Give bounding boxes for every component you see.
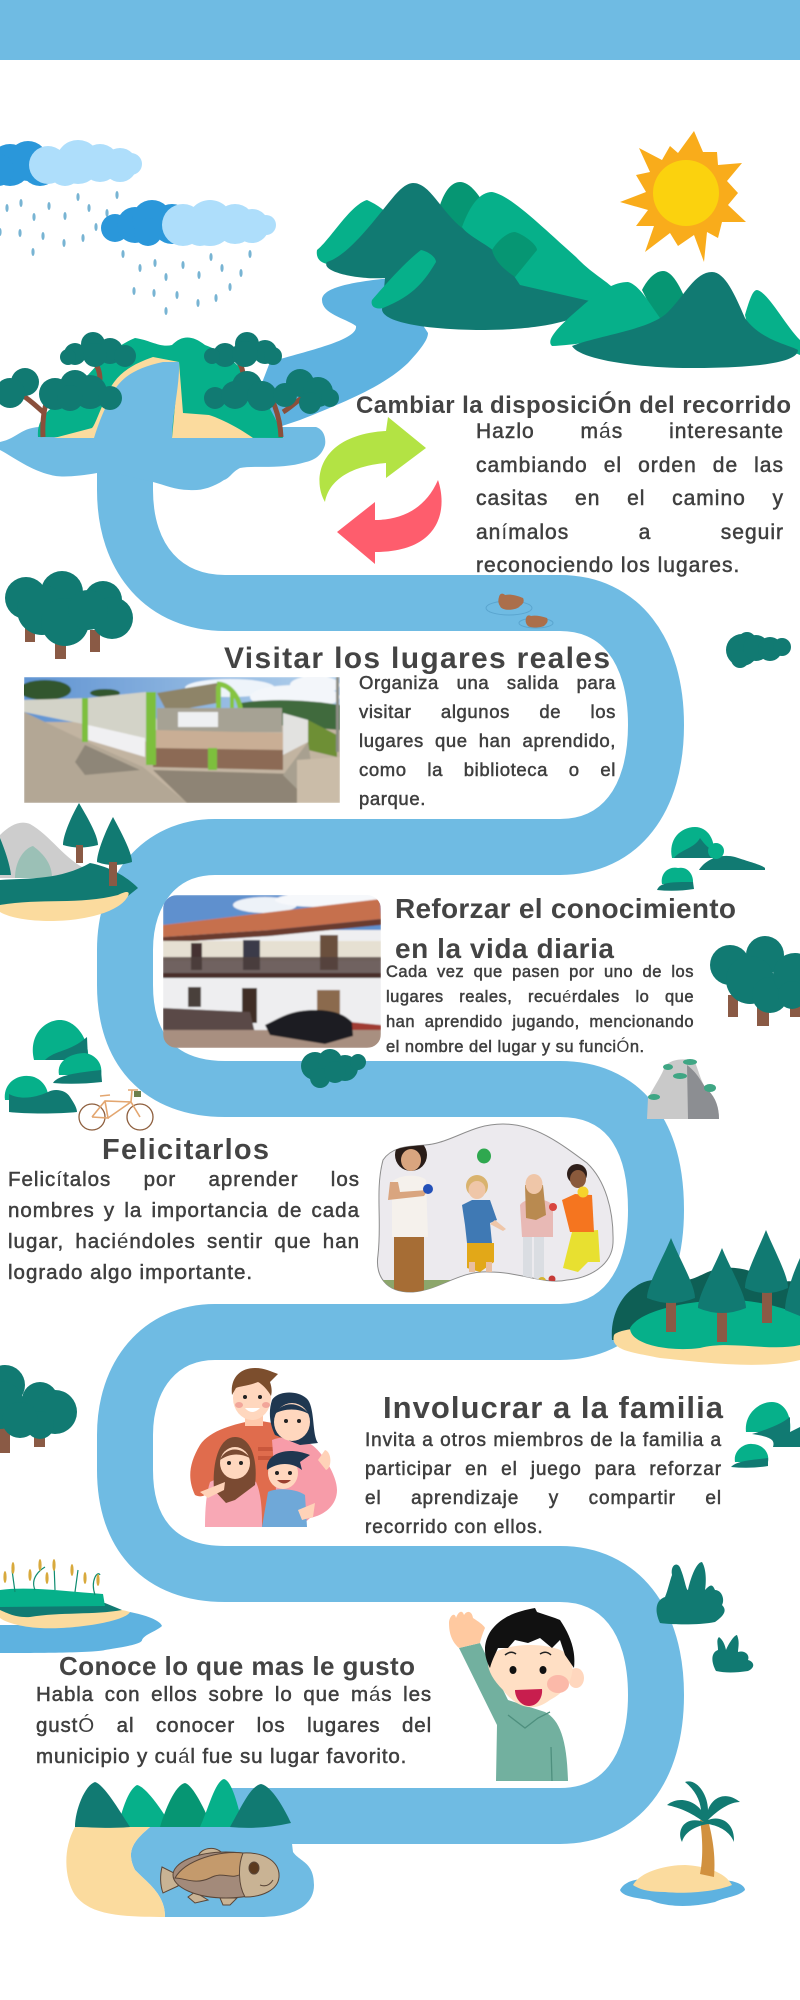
text: reinforce in daily life: Cada vez que pasen por uno de los (386, 963, 694, 981)
trees, right of reinforce section (710, 936, 800, 1026)
bush on river (301, 1049, 366, 1088)
text: reinforce in daily life: lugares reales, recuérdales lo que (386, 988, 694, 1006)
text: change the route: casitas en el camino y (476, 487, 784, 510)
waving boy illustration (449, 1608, 584, 1781)
text: congratulate them: nombres y la importancia de cada (8, 1199, 360, 1222)
icon: capybaras in river (486, 594, 553, 628)
family illustration (190, 1368, 337, 1527)
bushes left with bicycle (5, 1020, 153, 1130)
rock with moss (647, 1059, 719, 1119)
text: visit real places: como la biblioteca o el (359, 759, 616, 780)
text: visit real places: Organiza una salida para (359, 672, 616, 693)
upper river branch (240, 278, 428, 440)
kids playing photo (377, 1124, 613, 1294)
text: congratulate them: logrado algo importante. (8, 1261, 253, 1284)
text: reinforce in daily life: han aprendido jugando, mencionando (386, 1013, 694, 1031)
text: congratulate them: lugar, haciéndoles sentir que han (8, 1230, 360, 1253)
forest row (75, 1779, 291, 1828)
heading: Conoce lo que mas le gusto: Conoce lo que mas le gusto (59, 1651, 415, 1681)
text: visit real places (358, 672, 616, 810)
icon: sun (620, 131, 746, 262)
text: congratulate them: Felicítalos por aprender los (8, 1168, 360, 1191)
trees, left of visit section (5, 571, 133, 659)
text: involve the family: participar en el juego para reforzar (365, 1459, 722, 1480)
heading: Felicitarlos: Felicitarlos (102, 1134, 269, 1166)
rock and pine island (0, 803, 138, 921)
icon: red curved arrow (337, 480, 442, 564)
clouds with rain, left (0, 140, 142, 256)
bushes right of family section (731, 1402, 800, 1468)
forest island, right (612, 1230, 800, 1365)
heading: Involucrar a la familia: Involucrar a la familia (383, 1390, 724, 1425)
winding river path (125, 450, 656, 1816)
text: involve the family: recorrido con ellos. (365, 1517, 544, 1538)
text: reinforce in daily life: el nombre del lugar y su funciÓn. (386, 1038, 645, 1056)
text: what they liked most (36, 1683, 432, 1768)
bushes right of second bend (657, 827, 765, 891)
text: reinforce in daily life (386, 963, 694, 1056)
top banner (0, 0, 800, 60)
text: visit real places: parque. (359, 788, 426, 809)
icon: green curved arrow (319, 417, 426, 502)
text: change the route: cambiando el orden de las (476, 454, 784, 476)
waterfall hill and trees (0, 332, 339, 438)
text: what they liked most: gustÓ al conocer los lugares del (36, 1714, 432, 1737)
icon: palm island (620, 1781, 745, 1906)
heading: Reforzar el conocimiento (395, 893, 736, 964)
text: involve the family: el aprendizaje y compartir el (365, 1488, 722, 1509)
text: what they liked most: Habla con ellos sobre lo que más les (36, 1683, 432, 1706)
text: involve the family: Invita a otros miembros de la familia a (365, 1430, 722, 1451)
text: what they liked most: municipio y cuál fue su lugar favorito. (36, 1745, 407, 1768)
heading: Reforzar el conocimiento: Reforzar el conocimiento (395, 893, 736, 924)
text: visit real places: visitar algunos de los (359, 701, 616, 722)
text: visit real places: lugares que han aprendido, (359, 730, 616, 751)
reed island, left (0, 1559, 162, 1653)
trees, left of family section (0, 1365, 77, 1453)
bush, right of river (726, 632, 791, 668)
heading: Reforzar el conocimiento: en la vida diaria (395, 933, 614, 964)
icon: fish (161, 1848, 279, 1905)
lake (0, 427, 325, 490)
mountains, right group (550, 271, 800, 368)
text: change the route: anímalos a seguir (476, 520, 784, 544)
clouds with rain, centre (101, 200, 276, 315)
text: change the route (476, 420, 784, 577)
grass bushes right (657, 1562, 753, 1672)
photo: park and court (19, 676, 340, 803)
heading: Visitar los lugares reales: Visitar los lugares reales (224, 642, 610, 675)
text: change the route: Hazlo más interesante (476, 420, 784, 443)
mountains, large group (317, 182, 612, 330)
bottom lake with sand (66, 1827, 314, 1917)
text: congratulate them (8, 1168, 360, 1284)
heading: Cambiar la disposicion: Cambiar la disposiciÓn del recorrido (356, 391, 791, 419)
text: change the route: reconociendo los lugares. (476, 554, 740, 577)
photo: colonial building (163, 893, 390, 1048)
text: involve the family (365, 1430, 722, 1538)
